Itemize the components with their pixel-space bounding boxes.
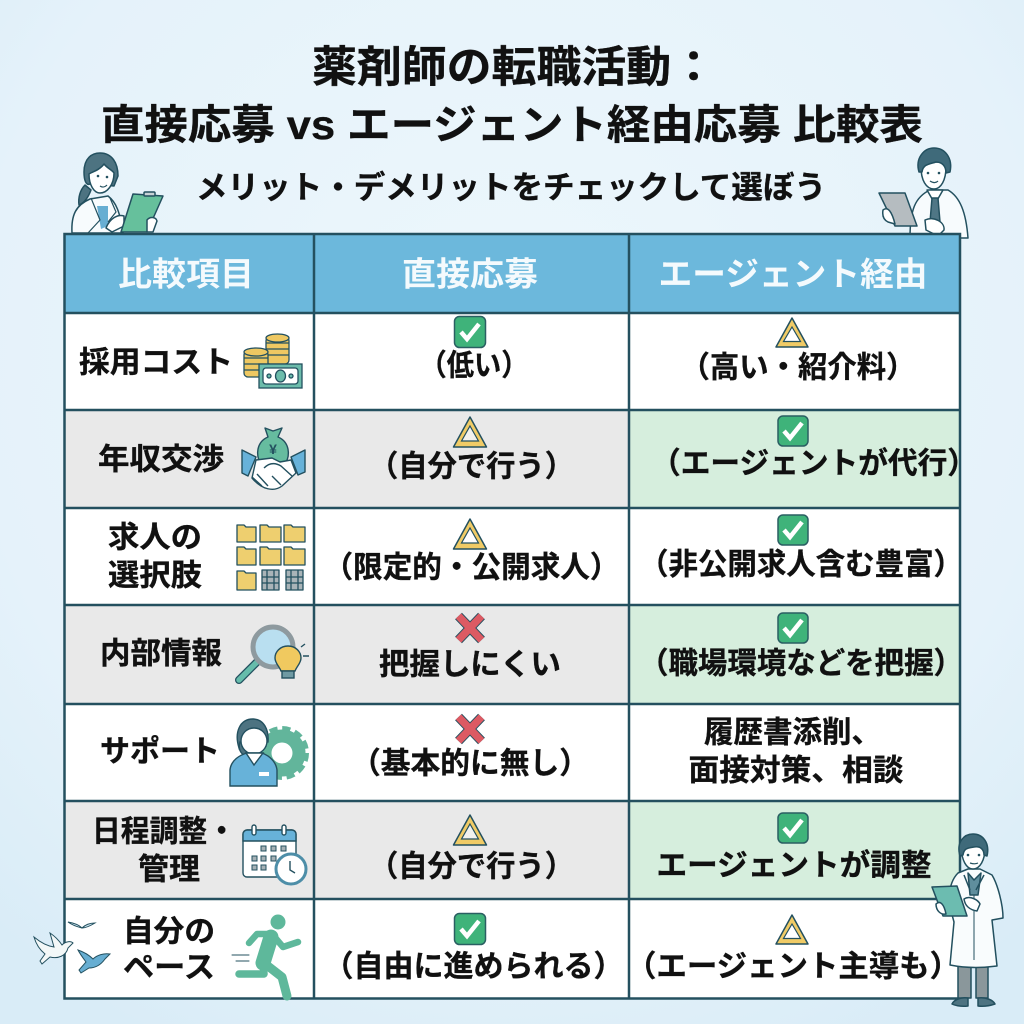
row labels: comparison items: サポート bbox=[100, 736, 220, 768]
cross: support bbox=[458, 717, 482, 741]
table header labels bbox=[118, 256, 928, 292]
agent column text: 履歴書添削、 bbox=[704, 716, 881, 750]
direct application column text: 把握しにくい bbox=[379, 648, 561, 682]
table header labels: エージェント経由 bbox=[658, 256, 928, 292]
icon: money bag and handshake: ¥ bbox=[269, 441, 277, 457]
row labels: comparison items: ペース bbox=[123, 952, 215, 984]
row labels: comparison items: 採用コスト bbox=[79, 346, 233, 380]
row backgrounds bbox=[64, 313, 960, 998]
agent column text: （エージェント主導も） bbox=[626, 950, 960, 984]
check: own pace bbox=[454, 914, 486, 944]
direct application column text: （自由に進められる） bbox=[324, 950, 624, 984]
agent column text: エージェントが調整 bbox=[656, 848, 932, 882]
row labels: comparison items: 自分の bbox=[123, 916, 215, 948]
icon: calendar and clock bbox=[243, 825, 306, 884]
row labels: comparison items: 選択肢 bbox=[108, 560, 202, 592]
icon: money bag and handshake bbox=[242, 428, 305, 489]
status marks: direct application bbox=[454, 316, 486, 944]
direct application column text bbox=[324, 350, 624, 984]
illustration: female pharmacist with clipboard bbox=[72, 153, 163, 233]
icon: running person bbox=[232, 914, 298, 996]
check: agent negotiates bbox=[778, 416, 808, 446]
status marks: agent bbox=[776, 318, 808, 944]
title: 薬剤師の転職活動： bbox=[312, 44, 716, 92]
agent column text: （職場環境などを把握） bbox=[639, 648, 963, 680]
agent column text: （高い・紹介料） bbox=[680, 352, 916, 384]
subtitle: メリット・デメリットをチェックして選ぼう bbox=[196, 169, 826, 205]
direct application column text: （低い） bbox=[420, 350, 528, 382]
cross: inside info bbox=[458, 616, 482, 640]
row labels: comparison items: 管理 bbox=[138, 854, 200, 886]
icon: folders and office buildings bbox=[237, 525, 305, 590]
row labels: comparison items bbox=[79, 346, 236, 984]
triangle: agent led bbox=[776, 915, 808, 944]
icon: magnifying glass and light bulb bbox=[239, 627, 309, 680]
table header labels: 比較項目 bbox=[118, 256, 254, 292]
title bbox=[101, 44, 923, 148]
table header labels: 直接応募 bbox=[402, 256, 538, 292]
table header background bbox=[64, 234, 960, 313]
illustration: male pharmacist with tablet bbox=[879, 148, 968, 238]
agent column text bbox=[626, 352, 977, 984]
agent column text: 面接対策、相談 bbox=[688, 754, 904, 788]
icon: coins and banknote bbox=[244, 334, 302, 388]
triangle: schedule yourself bbox=[454, 815, 486, 845]
direct application column text: （自分で行う） bbox=[369, 850, 574, 884]
direct application column text: （自分で行う） bbox=[369, 450, 574, 484]
icon: support staff and gear bbox=[230, 719, 306, 786]
triangle: limited listings bbox=[454, 519, 486, 549]
row labels: comparison items: 年収交渉 bbox=[98, 444, 224, 476]
check: low cost bbox=[454, 316, 486, 348]
triangle: negotiate yourself bbox=[454, 417, 486, 447]
direct application column text: （限定的・公開求人） bbox=[324, 552, 620, 584]
illustration: birds bbox=[34, 922, 110, 973]
title: 直接応募 vs エージェント経由応募 比較表 bbox=[101, 102, 923, 148]
check: rich listings bbox=[778, 515, 808, 545]
row labels: comparison items: 日程調整・ bbox=[92, 816, 236, 848]
row labels: comparison items: 内部情報 bbox=[100, 638, 222, 670]
agent column text: （非公開求人含む豊富） bbox=[639, 548, 963, 582]
illustration: doctor standing with clipboard bbox=[932, 834, 1003, 1006]
agent column text: （エージェントが代行） bbox=[651, 446, 977, 480]
direct application column text: （基本的に無し） bbox=[351, 748, 589, 780]
check: agent schedules bbox=[778, 813, 808, 843]
comparison table bbox=[64, 234, 960, 998]
row labels: comparison items: 求人の bbox=[108, 522, 202, 554]
check: workplace info bbox=[778, 613, 808, 643]
triangle: high cost bbox=[776, 318, 808, 347]
